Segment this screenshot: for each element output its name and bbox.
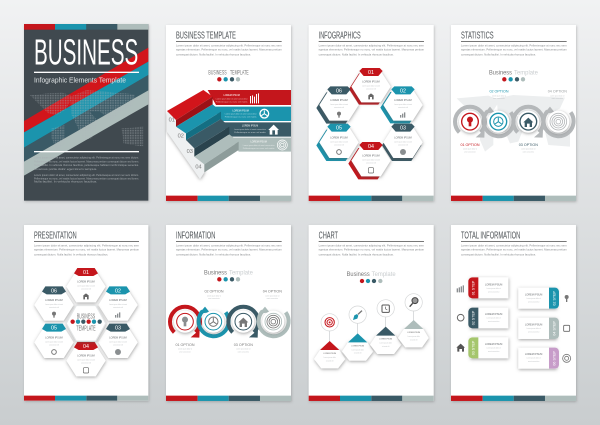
step 2: LOREM IPSUM — [351, 345, 365, 347]
option captions: Lorem ipsum dolor sit — [521, 148, 536, 151]
hexagon 05: consectetur elit — [334, 143, 345, 146]
step 02 right: LOREM IPSUM — [525, 293, 542, 296]
step 4: LOREM IPSUM — [407, 332, 421, 334]
step 3 — [370, 300, 401, 354]
hexagon 05: consectetur elit — [49, 343, 60, 346]
intro text: Lorem ipsum dolor sit amet, consectetur adipiscing elit. Pellentesque at nunc nec sem — [176, 244, 282, 247]
hexagon 03: 03 — [115, 326, 121, 332]
hexagon 06: 06 — [51, 288, 57, 294]
step 3: LOREM IPSUM — [379, 339, 393, 341]
heading rule — [176, 240, 282, 243]
option labels — [175, 290, 282, 347]
colour bar — [166, 196, 291, 201]
option bands — [208, 90, 291, 152]
sheet — [309, 225, 434, 401]
hexagon 05: LOREM IPSUM — [330, 136, 348, 139]
hexagon 06 — [34, 286, 74, 321]
intro text: egestas elementum. Pellentesque eu nunc, vel mattis luctus laoreet. Maecenas pretium — [461, 248, 567, 251]
cover body text: Vivamus porta dolor eget lorem tempus. — [34, 168, 98, 171]
subheading: TEMPLATE — [230, 69, 249, 76]
option labels: 04 OPTION — [263, 290, 282, 294]
step 01: 01 STEP — [472, 280, 476, 295]
hexagon 02: Lorem ipsum dolor sit amet — [394, 103, 413, 106]
band text: Pellentesque eu nunc vel mattis — [234, 131, 266, 134]
step 3: sit amet elit — [382, 345, 390, 348]
step 03: amet consectetur — [488, 350, 500, 353]
hexagon 04: 04 — [83, 344, 89, 350]
heading: INFORMATION — [176, 230, 215, 241]
intro text: Lorem ipsum dolor sit amet, consectetur adipiscing elit. Pellentesque at nunc nec sem — [319, 44, 424, 47]
cover title: BUSINESS — [34, 32, 138, 73]
intro text — [34, 244, 139, 256]
band icons — [250, 93, 287, 150]
cover sheet — [24, 24, 148, 201]
intro text: egestas elementum. Pellentesque eu nunc, vel mattis luctus laoreet. Maecenas pretium — [176, 48, 282, 51]
hexagon 03: consectetur elit — [398, 143, 409, 146]
colour bar — [166, 396, 291, 401]
hexagon 01: LOREM IPSUM — [77, 281, 95, 284]
intro text — [319, 44, 424, 56]
panel: business template — [166, 25, 291, 201]
step 02 right — [518, 288, 559, 309]
step 04 right: 04 STEP — [552, 320, 556, 336]
hexagon 02 — [380, 86, 423, 123]
heading rule — [319, 40, 424, 43]
centre hexagon — [66, 306, 106, 341]
step 4: Lorem ipsum dolor — [408, 335, 420, 338]
subheading: BUSINESS — [208, 69, 227, 76]
diagonal stripes — [24, 48, 148, 176]
panel: total information — [451, 225, 576, 401]
step 02: LOREM IPSUM — [485, 313, 502, 316]
centre hexagon: TEMPLATE — [76, 326, 96, 333]
subheading: Business — [489, 69, 512, 76]
hexagon 05: LOREM IPSUM — [45, 336, 63, 339]
hexagon 06: Lorem ipsum dolor sit amet — [330, 103, 349, 106]
3D staircase: 01 — [169, 118, 175, 124]
hexagon 06: Lorem ipsum dolor sit amet — [45, 303, 64, 306]
hexagon 03: Lorem ipsum dolor sit amet — [109, 340, 128, 343]
step 03: 03 STEP — [472, 340, 476, 355]
intro text — [461, 44, 567, 56]
3D staircase: 04 — [195, 164, 202, 170]
intro text: consequat dictum. Nulla facilisi. In vehicula rhoncus faucibus. — [319, 53, 394, 56]
hexagon 05: 05 — [51, 326, 57, 332]
intro text: Lorem ipsum dolor sit amet, consectetur adipiscing elit. Pellentesque at nunc nec sem — [176, 44, 282, 47]
option rings — [455, 107, 574, 136]
step 01 — [468, 277, 508, 298]
band text: Lorem ipsum dolor sit amet consectetur — [216, 97, 248, 100]
intro text — [176, 44, 282, 56]
ring arrows — [191, 307, 270, 338]
hexagon 06 — [316, 86, 359, 124]
right icons — [563, 295, 571, 362]
ring arrows — [476, 107, 555, 138]
hexagon 04: Lorem ipsum dolor sit amet — [77, 359, 96, 362]
panel: cover — [24, 24, 148, 201]
intro text: Lorem ipsum dolor sit amet, consectetur adipiscing elit. Pellentesque at nunc nec sem — [34, 244, 139, 247]
hexagon 04: 04 — [368, 144, 374, 150]
step 2 — [342, 306, 373, 361]
step 04 right: LOREM IPSUM — [525, 323, 542, 326]
sheet — [166, 25, 291, 201]
hexagon 04: consectetur elit — [81, 362, 92, 365]
panel: information — [166, 225, 291, 401]
option labels: 01 OPTION — [175, 343, 195, 347]
step 02: 02 STEP — [472, 310, 476, 325]
intro text: Lorem ipsum dolor sit amet, consectetur adipiscing elit. Pellentesque at nunc nec sem — [319, 244, 424, 247]
intro text: egestas elementum. Pellentesque eu nunc, vel mattis luctus laoreet. Maecenas pretium — [319, 248, 424, 251]
band text: LOREM IPSUM — [233, 110, 249, 112]
hexagon 02: consectetur elit — [398, 106, 409, 109]
option rings — [170, 307, 289, 336]
step 02: amet consectetur — [488, 320, 500, 323]
option captions: amet consectetur — [523, 150, 535, 153]
colour dots — [502, 77, 525, 81]
step 04 right: amet consectetur — [528, 330, 540, 333]
centre hexagon: BUSINESS — [77, 313, 95, 320]
step 06 right: 06 STEP — [552, 350, 556, 366]
heading rule — [176, 40, 282, 43]
hexagon 04: LOREM IPSUM — [362, 155, 380, 158]
step 04 right: Lorem ipsum dolor sit — [527, 327, 541, 330]
step 06 right: LOREM IPSUM — [525, 353, 542, 356]
step 3: Lorem ipsum dolor — [380, 342, 392, 345]
panel: chart — [309, 225, 434, 401]
option discs — [459, 111, 569, 133]
option captions: amet consectetur — [493, 97, 505, 100]
colour bar — [309, 196, 434, 201]
subheading: Template — [372, 271, 396, 278]
intro text: egestas elementum. Pellentesque eu nunc, vel mattis luctus laoreet. Maecenas pretium — [176, 248, 282, 251]
hexagon 01: 01 — [368, 70, 374, 76]
intro text: consequat dictum. Nulla facilisi. In vehicula rhoncus faucibus. — [34, 253, 109, 256]
heading: INFOGRAPHICS — [319, 30, 361, 41]
hexagon 06: consectetur elit — [334, 106, 345, 109]
option labels: 02 OPTION — [489, 90, 509, 94]
colour dots — [360, 279, 382, 283]
cover subtitle: Infographic Elements Template — [34, 75, 126, 84]
step 06 right: amet consectetur — [528, 360, 540, 363]
subheading — [347, 271, 396, 278]
cover body text: Pellentesque eu nunc, vel mattis fuctus laoreet. Maecenas pretium consequat dictum sed lorem. — [34, 160, 139, 163]
band text — [216, 95, 275, 150]
step 01: amet consectetur — [488, 290, 500, 293]
step 4: sit amet elit — [410, 338, 418, 341]
hexagon 03 — [98, 324, 138, 358]
upper rule — [34, 72, 139, 73]
hexagon 02: Lorem ipsum dolor sit amet — [109, 303, 128, 306]
hexagon 04: Lorem ipsum dolor sit amet — [362, 159, 381, 162]
step 4 — [398, 294, 429, 347]
panel: infographics — [309, 25, 434, 201]
hexagon 05: Lorem ipsum dolor sit amet — [45, 340, 64, 343]
hexagon 02: LOREM IPSUM — [394, 99, 412, 102]
hexagon 06: 06 — [336, 88, 342, 94]
option captions: amet consectetur — [552, 97, 564, 100]
intro text: consequat dictum. Nulla facilisi. In vehicula rhoncus faucibus. — [176, 253, 251, 256]
hexagon 01: consectetur elit — [81, 288, 92, 291]
hexagon 03: LOREM IPSUM — [109, 336, 127, 339]
intro text: egestas elementum. Pellentesque eu nunc, vel mattis luctus laoreet. Maecenas pretium — [319, 48, 424, 51]
sheet — [24, 225, 148, 401]
subheading: Business — [347, 271, 370, 278]
band text: Pellentesque eu nunc vel mattis — [243, 147, 275, 150]
panel: presentation — [24, 225, 148, 401]
3D staircase: 03 — [187, 149, 193, 155]
step 02 right: 02 STEP — [552, 290, 556, 306]
sheet — [451, 25, 576, 201]
heading rule — [461, 40, 567, 43]
cover body text: Lorem ipsum dolor sit amet, consectetur adipiscing elit. Pellentesque at nunc nec sem dictum. — [34, 157, 139, 160]
option labels: 02 OPTION — [204, 290, 224, 294]
option captions: amet consectetur — [267, 297, 279, 300]
option captions: Lorem ipsum dolor sit — [492, 94, 507, 97]
hexagon 05: 05 — [336, 126, 342, 132]
intro text: Lorem ipsum dolor sit amet, consectetur adipiscing elit. Pellentesque at nunc nec sem — [461, 44, 567, 47]
option icons — [177, 313, 282, 330]
option captions: amet consectetur — [179, 350, 191, 353]
heading: PRESENTATION — [34, 230, 77, 241]
option captions — [178, 294, 280, 353]
step 01: LOREM IPSUM — [485, 283, 502, 286]
intro text: consequat dictum. Nulla facilisi. In vehicula rhoncus faucibus. — [176, 53, 251, 56]
hexagon 01: 01 — [83, 270, 89, 276]
option captions: amet consectetur — [238, 350, 250, 353]
cover body text — [34, 157, 139, 184]
intro text: egestas elementum. Pellentesque eu nunc, vel mattis luctus laoreet. Maecenas pretium — [34, 248, 139, 251]
heading rule — [34, 240, 139, 243]
hexagon 05 — [316, 124, 359, 161]
sheet — [166, 225, 291, 401]
left icons — [456, 285, 465, 352]
option captions: amet consectetur — [208, 297, 220, 300]
option labels: 03 OPTION — [234, 343, 253, 347]
colour bar — [451, 396, 576, 401]
dotted world map — [30, 90, 143, 150]
step 02 — [468, 308, 508, 328]
intro text: egestas elementum. Pellentesque eu nunc, vel mattis luctus laoreet. Maecenas pretium — [461, 48, 567, 51]
hexagon 01 — [349, 68, 391, 105]
hexagon 01: LOREM IPSUM — [362, 81, 380, 84]
step 1 — [314, 314, 345, 368]
panel: statistics — [451, 25, 576, 201]
subheading: Template — [514, 69, 538, 76]
band text: LOREM IPSUM — [224, 95, 240, 97]
option labels: 03 OPTION — [519, 143, 538, 147]
step 03 — [468, 337, 508, 358]
hexagon 03: LOREM IPSUM — [394, 136, 412, 139]
option labels — [460, 90, 567, 147]
hexagon 02: LOREM IPSUM — [109, 299, 127, 302]
world map — [457, 95, 570, 152]
intro text — [461, 244, 567, 256]
intro text: consequat dictum. Nulla facilisi. In vehicula rhoncus faucibus. — [461, 53, 536, 56]
hexagon 02: consectetur elit — [113, 306, 124, 309]
3D staircase — [167, 90, 239, 179]
colour bar — [24, 396, 148, 401]
hexagon 05: Lorem ipsum dolor sit amet — [330, 140, 349, 143]
colour dots — [217, 277, 240, 281]
option captions: Lorem ipsum dolor sit — [236, 348, 251, 351]
hexagon 04 — [348, 142, 391, 179]
option icons — [462, 113, 567, 130]
step 06 right: Lorem ipsum dolor sit — [527, 357, 541, 360]
hexagon 03: 03 — [400, 126, 406, 132]
band text: LOREM IPSUM — [251, 142, 267, 144]
hexagon 03 — [382, 124, 423, 161]
step 06 right — [518, 348, 559, 369]
band text: Pellentesque eu nunc vel mattis — [225, 116, 257, 119]
hexagon 06: consectetur elit — [49, 306, 60, 309]
cover body text: Nulla facilisi. In vehicula rhoncus faucibus, pellentesque habitant morbi tristique senectus. — [34, 164, 139, 167]
step 1: LOREM IPSUM — [323, 353, 337, 355]
band text: Lorem ipsum dolor sit amet consectetur — [225, 113, 257, 116]
step 02 right: Lorem ipsum dolor sit — [527, 297, 541, 300]
option captions: amet consectetur — [464, 150, 476, 153]
step 02 right: amet consectetur — [528, 300, 540, 303]
option discs — [174, 311, 284, 333]
band text: Lorem ipsum dolor sit amet consectetur — [234, 128, 266, 131]
intro text: consequat dictum. Nulla facilisi. In vehicula rhoncus faucibus. — [319, 253, 394, 256]
option captions: Lorem ipsum dolor sit — [550, 94, 565, 97]
step 03: Lorem ipsum dolor sit — [487, 347, 501, 350]
heading: STATISTICS — [461, 30, 494, 41]
sheet — [309, 25, 434, 201]
hexagon 05 — [34, 324, 74, 358]
step 1: sit amet elit — [326, 359, 334, 362]
heading: CHART — [319, 230, 338, 241]
colour bar — [451, 196, 576, 201]
band text: LOREM IPSUM — [242, 126, 258, 128]
intro text: Lorem ipsum dolor sit amet, consectetur adipiscing elit. Pellentesque at nunc nec sem — [461, 244, 567, 247]
subheading: Template — [229, 269, 253, 276]
step 01: Lorem ipsum dolor sit — [487, 287, 501, 290]
colour bar — [309, 396, 434, 401]
hexagon 02 — [98, 286, 138, 321]
option captions: Lorem ipsum dolor sit — [178, 348, 193, 351]
sheet — [451, 225, 576, 401]
band text: Pellentesque eu nunc vel mattis — [216, 100, 248, 103]
heading rule — [319, 240, 424, 243]
band text: Lorem ipsum dolor sit amet consectetur — [243, 144, 275, 147]
cover colour bar — [24, 24, 148, 30]
hexagon 02: 02 — [400, 88, 406, 94]
option captions: Lorem ipsum dolor sit — [265, 294, 280, 297]
lower rule — [34, 151, 139, 152]
subheading — [489, 69, 538, 76]
subheading — [204, 269, 253, 276]
heading: TOTAL INFORMATION — [461, 230, 520, 241]
hexagon 04 — [66, 342, 106, 376]
cover body text: Nulla facilisi. In vehicula rhoncus faucibus. — [34, 181, 98, 184]
step 03: LOREM IPSUM — [485, 343, 502, 346]
hexagon 01 — [66, 268, 106, 302]
option captions — [463, 94, 565, 153]
step 1: Lorem ipsum dolor — [324, 356, 336, 359]
hexagon 01: Lorem ipsum dolor sit amet — [362, 85, 381, 88]
step 2: Lorem ipsum dolor — [352, 348, 364, 351]
colour dots — [217, 77, 240, 81]
hexagon 04: consectetur elit — [366, 162, 377, 165]
hexagon 01: consectetur elit — [366, 88, 377, 91]
option labels: 04 OPTION — [548, 90, 567, 94]
option captions: Lorem ipsum dolor sit — [207, 294, 222, 297]
step 02: Lorem ipsum dolor sit — [487, 317, 501, 320]
hexagon 06: LOREM IPSUM — [330, 99, 348, 102]
option captions: Lorem ipsum dolor sit — [463, 148, 478, 151]
intro text — [319, 244, 424, 256]
hexagon 02: 02 — [115, 288, 121, 294]
cover body text: Pellentesque eu nunc, vel mattis fuctus laoreet. Maecenas pretium consequat dictum sed lorem. — [34, 177, 139, 180]
heading: BUSINESS TEMPLATE — [176, 30, 236, 41]
3D staircase: 02 — [178, 134, 184, 140]
heading rule — [461, 240, 567, 243]
step 04 right — [518, 318, 559, 339]
hexagon 06: LOREM IPSUM — [45, 299, 63, 302]
cover body text: Lorem ipsum dolor sit amet, consectetur adipiscing elit. Pellentesque at nunc nec sem dictum. — [34, 174, 139, 177]
option labels: 01 OPTION — [460, 143, 480, 147]
intro text: consequat dictum. Nulla facilisi. In vehicula rhoncus faucibus. — [461, 253, 536, 256]
step 2: sit amet elit — [354, 352, 362, 355]
intro text — [176, 244, 282, 256]
hexagon 03: consectetur elit — [113, 343, 124, 346]
hexagon 01: Lorem ipsum dolor sit amet — [77, 285, 96, 288]
hexagon 03: Lorem ipsum dolor sit amet — [394, 140, 413, 143]
subheading: Business — [204, 269, 227, 276]
hexagon 04: LOREM IPSUM — [77, 355, 95, 358]
